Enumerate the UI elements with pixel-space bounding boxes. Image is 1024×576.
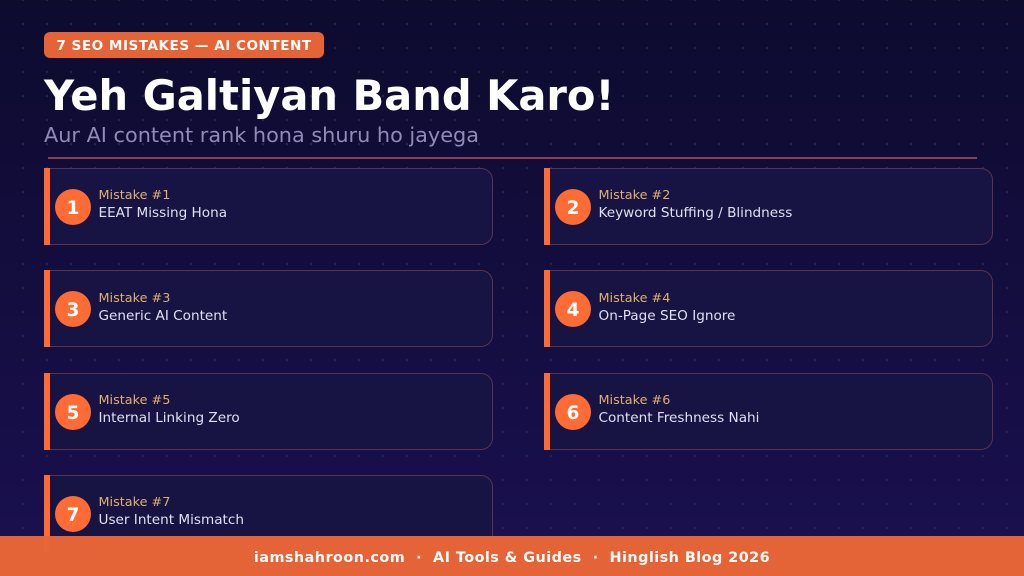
- number badge 4: 4: [567, 300, 579, 321]
- footer bar: [0, 536, 1024, 576]
- number badge 1: 1: [67, 198, 79, 219]
- number badge 6: [555, 394, 591, 430]
- card: mistake 3: [44, 270, 493, 347]
- label: Mistake #2: Mistake #2: [598, 188, 670, 203]
- number badge 5: [55, 394, 91, 430]
- subtitle: Aur AI content rank hona shuru ho jayega: [44, 123, 479, 147]
- text: User Intent Mismatch: User Intent Mismatch: [98, 512, 244, 528]
- text: On-Page SEO Ignore: On-Page SEO Ignore: [598, 308, 735, 324]
- number badge 7: [55, 496, 91, 532]
- footer bar: iamshahroon.com · AI Tools & Guides · Hinglish Blog 2026: [254, 550, 770, 566]
- label: Mistake #3: Mistake #3: [98, 291, 170, 306]
- number badge 2: [555, 189, 591, 225]
- card: mistake 5: [44, 373, 493, 450]
- card: mistake 4: [544, 270, 993, 347]
- number badge 5: 5: [67, 403, 79, 424]
- card: mistake 1: [44, 168, 493, 245]
- number badge 1: [55, 189, 91, 225]
- tag: 7 SEO mistakes: 7 SEO MISTAKES — AI CONTENT: [56, 38, 312, 54]
- label: Mistake #7: Mistake #7: [98, 495, 170, 510]
- number badge 7: 7: [67, 505, 79, 526]
- title: Yeh Galtiyan Band Karo!: [44, 71, 614, 120]
- text: Generic AI Content: Generic AI Content: [98, 308, 227, 324]
- tag: 7 SEO mistakes: [44, 32, 324, 58]
- number badge 6: 6: [567, 403, 579, 424]
- number badge 2: 2: [567, 198, 579, 219]
- text: Internal Linking Zero: Internal Linking Zero: [98, 410, 240, 426]
- text: Keyword Stuffing / Blindness: Keyword Stuffing / Blindness: [598, 205, 792, 221]
- text: Content Freshness Nahi: Content Freshness Nahi: [598, 410, 759, 426]
- text: EEAT Missing Hona: EEAT Missing Hona: [98, 205, 227, 221]
- label: Mistake #5: Mistake #5: [98, 393, 170, 408]
- card: mistake 2: [544, 168, 993, 245]
- number badge 3: [55, 291, 91, 327]
- number badge 3: 3: [67, 300, 79, 321]
- label: Mistake #6: Mistake #6: [598, 393, 670, 408]
- card: mistake 7: [44, 475, 493, 536]
- label: Mistake #1: Mistake #1: [98, 188, 170, 203]
- card: mistake 6: [544, 373, 993, 450]
- number badge 4: [555, 291, 591, 327]
- label: Mistake #4: Mistake #4: [598, 291, 670, 306]
- divider line: [48, 157, 977, 159]
